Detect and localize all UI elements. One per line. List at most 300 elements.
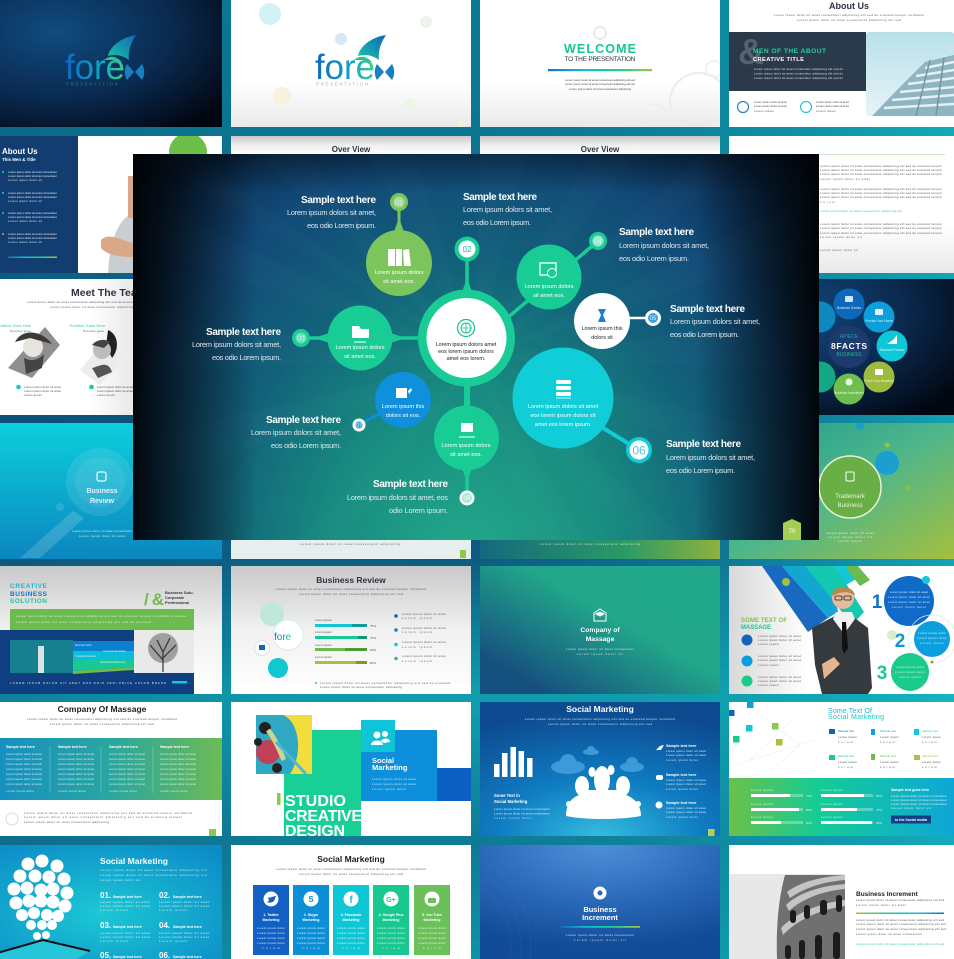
- circle 03: teal folder: sit amet eos.: [344, 354, 376, 360]
- cards intro text: Lorem ipsum dolor sit amet consectetur adipiscing elit sed do eiusmod tempor incididunt: [276, 867, 426, 871]
- text block 06: [666, 439, 755, 475]
- increment intro text: Lorem ipsum dolor sit amet: [856, 903, 906, 907]
- heading: some text of social marketing: Some Text Of: [828, 708, 872, 715]
- gradient band with four columns: Lorem ipsum dolor sit amet: [160, 752, 196, 756]
- gradient band with four columns: Lorem ipsum dolor sit amet: [58, 762, 94, 766]
- numbered items: 01.: [100, 891, 111, 900]
- gradient band with four columns: Lorem ipsum dolor sit amet: [160, 777, 196, 781]
- slide: apiece 8 facts business: [819, 279, 954, 415]
- logo: forex on white: PRESENTATION: [316, 82, 368, 86]
- bullet list: Lorem ipsum dolor sit amet: [402, 612, 446, 616]
- gradient band with four columns: Lorem ipsum dolor sit amet: [6, 752, 42, 756]
- text block 08: Sample text here: [373, 479, 448, 490]
- circle 04: teal browser: sit amet eos.: [533, 293, 565, 299]
- icon list: Lorem ipsum dolor sit amet: [758, 679, 801, 683]
- article text: Lorem ipsum dolor sit amet consectetur adipiscing elit sed do eiusmod tempor: [820, 191, 942, 195]
- balloon intro text: [100, 868, 207, 882]
- slide strip below main slide, left: [231, 540, 471, 559]
- circle 03: teal folder: Lorem ipsum dolors: [335, 345, 385, 351]
- navy panel with pictures: Creative Business: [75, 654, 97, 658]
- magnifier graphic: [20, 448, 134, 558]
- gradient band with four columns: Lorem ipsum dolor: [6, 789, 34, 793]
- icon grid: Lorem: [922, 740, 938, 744]
- numbered circles: 1: [872, 592, 883, 613]
- icon circles with text: Lorem ipsum dolor sit amet: [754, 100, 787, 104]
- bullet list: [394, 612, 446, 663]
- text block 04: [619, 227, 709, 263]
- article text: Lorem ipsum dolor sit: [820, 248, 858, 252]
- slide: social marketing people: [480, 702, 720, 836]
- card: you tube: [414, 885, 450, 955]
- card: facebook: Lorem: [342, 946, 360, 950]
- dotted wave pattern: [482, 860, 531, 959]
- numbered items: Sample text here: [113, 925, 142, 929]
- trademark subtext: Lorem ipsum dolor sit amet: [826, 531, 874, 535]
- card: facebook: Lorem ipsum dolor: [337, 931, 365, 935]
- increment body text: Lorem ipsum dolor sit amet consectetur: [856, 932, 922, 936]
- main slide: six step circle diagram: [133, 154, 819, 540]
- text block 06: Lorem ipsum dolors sit amet,: [666, 453, 755, 462]
- slide: trademark business: [729, 423, 954, 559]
- slide: text article: [729, 136, 954, 273]
- trademark circle: Business: [837, 502, 863, 509]
- green block: [284, 730, 361, 836]
- node 02: [454, 236, 480, 262]
- node 05: 05: [650, 316, 657, 322]
- navy sidebar: About Us: [2, 147, 38, 156]
- social text: Lorem ipsum dolor: [372, 787, 406, 791]
- gradient band with four columns: Lorem ipsum dolor sit amet: [109, 772, 145, 776]
- team intro text: [27, 300, 147, 309]
- numbered items: Lorem ipsum dolor sit amet: [159, 935, 209, 939]
- card: google plus: Lorem ipsum dolor: [377, 936, 405, 940]
- article text: Lorem ipsum dolor sit amet consectetur adipiscing elit sed do eiusmod tempor: [820, 222, 942, 226]
- dark title panel: Lorem ipsum dolor sit amet consectetur adipiscing elit sed do: [754, 76, 843, 80]
- heading: social marketing: Social Marketing: [100, 856, 168, 866]
- node 05: [645, 310, 661, 326]
- progress bars: Lorem ipsum: [315, 655, 332, 659]
- icon list: Lorem ipsum dolor sit amet: [758, 634, 801, 638]
- slide: welcome: [480, 0, 720, 127]
- portrait of man: [101, 133, 207, 273]
- navy sidebar: Lorem ipsum dolor sit amet consectetur: [8, 215, 57, 219]
- gradient band with four columns: Lorem ipsum dolor sit amet: [58, 757, 94, 761]
- article text: Lorem ipsum dolor sit amet consectetur adipiscing elit sed do eiusmod tempor: [820, 172, 942, 176]
- text block 03: [192, 327, 281, 362]
- icon grid: Sample text: [880, 729, 896, 733]
- circle 01: green books: [366, 230, 432, 296]
- bullet list: Lorem ipsum dolor sit amet: [402, 626, 446, 630]
- increment body text: Lorem ipsum dolor sit amet consectetur adipiscing elit sed: [856, 918, 944, 922]
- green text band: Lorem ipsum dolor sit amet consectetur adipiscing elit sed do eiusmod tempor incididunt ut labore: [16, 614, 186, 618]
- team member two: Position goes: [83, 329, 104, 333]
- icon list: [742, 634, 801, 687]
- feature list: Lorem ipsum dolor sit amet: [666, 749, 706, 753]
- welcome text block: Lorem ipsum dolor sit amet consectetur adipiscing elit sed: [565, 78, 635, 82]
- text block 08: Lorem ipsum dolors sit amet, eos: [347, 493, 448, 502]
- numbered items: Lorem ipsum dolor sit amet: [100, 904, 150, 908]
- card: skype: [293, 885, 329, 955]
- people illustration: [566, 765, 641, 819]
- cover subtext: [566, 647, 634, 656]
- card: google plus: 4. Google Plus: [379, 913, 403, 917]
- circle 08: teal monitor: sit amet eos.: [450, 452, 482, 458]
- navy sidebar: Lorem ipsum dolor sit: [8, 178, 42, 182]
- facts wheel: Provide Your Home: [865, 319, 893, 323]
- slide: over view right: Over View: [581, 145, 620, 154]
- navy panel with pictures: Corporate Business: [103, 649, 126, 653]
- icon list: Lorem ipsum: [758, 642, 780, 646]
- card: skype: Lorem ipsum dolor: [297, 936, 325, 940]
- side text with button: Sample text goes here: [891, 788, 929, 792]
- heading: studio creative design: CREATIVE: [285, 808, 362, 825]
- card: skype: 2. Skype: [304, 913, 318, 917]
- numbered items: Lorem ipsum: [100, 939, 128, 943]
- slide: over view left: [231, 136, 471, 154]
- heading: business increment: Business Increment: [856, 891, 919, 898]
- numbered items: Lorem ipsum: [100, 908, 128, 912]
- cards intro text: Lorem ipsum dolor sit amet consectetur adipiscing elit sed: [299, 872, 403, 876]
- slide: about us with portrait: [0, 136, 222, 273]
- text block 04: eos odio Lorem ipsum.: [619, 254, 689, 263]
- gradient band with progress bars: 75%: [806, 794, 812, 798]
- text block 02: Sample text here: [463, 192, 537, 203]
- page marker: [209, 829, 216, 836]
- bullet list: Lorem ipsum: [402, 630, 432, 634]
- gradient band with four columns: Lorem ipsum dolor: [58, 789, 86, 793]
- page number tag: [783, 519, 801, 540]
- gradient band with four columns: Lorem ipsum dolor sit amet: [160, 772, 196, 776]
- numbered circles: [872, 576, 954, 691]
- icon: recycle circle: [594, 886, 606, 900]
- gradient band with four columns: Lorem ipsum dolor sit amet: [109, 777, 145, 781]
- feature list: [656, 744, 706, 819]
- article text: Lorem ipsum dolor sit amet consectetur adipiscing elit sed do eiusmod tempor: [820, 164, 942, 168]
- numbered circles: Lorem ipsum dolor: [892, 605, 926, 609]
- navy sidebar: [0, 136, 78, 273]
- text block 05: [670, 304, 760, 339]
- footnote: [315, 681, 450, 689]
- icon grid: Sample text: [880, 754, 896, 758]
- card: you tube: Marketing: [424, 918, 440, 922]
- card: you tube: Lorem ipsum dolor: [418, 936, 446, 940]
- text block 07: [251, 415, 341, 450]
- balloon intro text: Lorem ipsum dolor sit amet consectetur adipiscing elit: [100, 873, 207, 877]
- heading: studio creative design: [285, 793, 362, 840]
- circle 06: big cyan server: Lorem ipsum dolors sit amet: [528, 404, 599, 410]
- icon grid: Lorem ipsum: [880, 760, 900, 764]
- green text band: [10, 609, 194, 630]
- social bubbles with logo: [254, 602, 303, 678]
- cards intro text: [276, 867, 426, 876]
- connectors: [301, 202, 653, 498]
- slide: business review bars: [231, 566, 471, 694]
- numbered items: Lorem ipsum dolor sit amet: [159, 900, 209, 904]
- bullet list: Lorem ipsum: [402, 659, 432, 663]
- trademark circle: [819, 456, 881, 518]
- card: skype: S: [308, 895, 314, 904]
- icon grid: Sample text: [922, 729, 938, 733]
- navy panel with pictures: LOREM IPSUM DOLOR SIT AMET EOS ODIO VERI PRICE COLOR BRAND: [10, 681, 167, 685]
- trademark subtext: [826, 531, 874, 543]
- gradient band with four columns: Lorem ipsum dolor sit amet: [160, 782, 196, 786]
- page marker: [708, 829, 714, 836]
- card: google plus: [373, 885, 409, 955]
- bullet list: Lorem ipsum dolor sit amet: [402, 654, 446, 658]
- article text: Lorem ipsum dolor sit amet consectetur adipiscing elit: [820, 209, 902, 213]
- text block 03: Sample text here: [206, 327, 281, 338]
- heading: some text of massage: [741, 618, 787, 631]
- slide: some text of massage with man: [729, 566, 954, 694]
- circle 05: white hourglass: dolors sit: [591, 335, 613, 341]
- columns intro text: [27, 717, 177, 726]
- chart caption: Lorem ipsum dolor: [494, 816, 532, 820]
- progress bars: Lorem ipsum: [315, 630, 332, 634]
- accent bar: [277, 793, 280, 805]
- text block 05: Lorem ipsum dolors sit amet,: [670, 317, 760, 326]
- slide strip below main slide, left: Lorem ipsum dolor sit amet consectetur adipiscing: [300, 542, 400, 546]
- blue blocks: [361, 720, 471, 801]
- numbered items: Sample text here: [173, 955, 202, 959]
- heading: meet the team: Meet The Team: [71, 287, 146, 299]
- card: google plus: Marketing: [383, 918, 399, 922]
- heading: some text of massage: SOME TEXT OF: [741, 618, 787, 624]
- card: twitter: Lorem ipsum dolor: [257, 926, 285, 930]
- card: you tube: 5. You Tube: [422, 913, 442, 917]
- text block 04: Sample text here: [619, 227, 694, 238]
- cover subtext: [566, 933, 634, 942]
- icon list: Lorem ipsum dolor sit amet: [758, 654, 801, 658]
- cover subtext: Lorem ipsum dolor sit amet consectetur: [566, 933, 634, 937]
- welcome text block: Lorem ipsum dolor sit amet consectetur adipiscing elit sed: [565, 82, 635, 86]
- dark title panel: MEN OF THE ABOUT: [753, 48, 826, 55]
- gradient band with progress bars: Lorem ipsum: [821, 815, 844, 819]
- gradient band with progress bars: Lorem ipsum: [751, 788, 774, 792]
- gradient band with four columns: Sample text here: [109, 745, 138, 749]
- increment body text: Lorem ipsum dolor sit amet consectetur adipiscing elit sed: [856, 942, 944, 946]
- feature list: Lorem ipsum dolor: [666, 758, 698, 762]
- node 06: [626, 437, 652, 463]
- gradient band with four columns: Sample text here: [6, 745, 35, 749]
- icon grid: Lorem ipsum: [922, 735, 942, 739]
- subheading: TO THE PRESENTATION: [564, 56, 636, 63]
- node 08: 08: [464, 496, 471, 502]
- icon circles with text: Lorem ipsum: [754, 109, 774, 113]
- slide: studio creative design: [231, 702, 471, 840]
- numbered items: Sample text here: [173, 895, 202, 899]
- text block 07: Lorem ipsum dolors sit amet,: [251, 428, 341, 437]
- network squares: [729, 702, 815, 772]
- diagonal colour stripes: [762, 566, 870, 632]
- balloon intro text: Lorem ipsum dolor sit: [100, 878, 140, 882]
- card: skype: Lorem ipsum dolor: [297, 941, 325, 945]
- text block 03: Lorem ipsum dolors sit amet,: [192, 340, 281, 349]
- text block 01: Sample text here: [301, 195, 376, 206]
- card: skype: Lorem: [302, 946, 320, 950]
- heading: company of massage: Company Of Massage: [58, 704, 147, 714]
- gradient band with four columns: Lorem ipsum dolor sit amet: [109, 782, 145, 786]
- gradient band with four columns: Lorem ipsum dolor sit amet: [58, 772, 94, 776]
- feature list: Lorem ipsum dolor sit amet: [666, 782, 706, 786]
- team member two: [70, 324, 133, 397]
- ampersand tagline: Professional: [165, 600, 189, 605]
- increment body text: [856, 918, 946, 946]
- card: skype: Lorem ipsum dolor: [297, 931, 325, 935]
- icon grid: Lorem: [922, 765, 938, 769]
- ampersand tagline: /&: [144, 590, 164, 609]
- feature list: Lorem ipsum dolor sit amet: [666, 810, 706, 814]
- gradient band with four columns: Lorem ipsum dolor: [160, 789, 188, 793]
- icon grid: Sample text: [838, 729, 854, 733]
- bottom note with icon: [6, 811, 192, 825]
- bottom note with icon: Lorem ipsum dolor sit amet consectetur adipiscing: [24, 820, 109, 824]
- icon circles with text: Lorem ipsum dolor sit amet: [816, 100, 849, 104]
- numbered circles: 2: [895, 631, 905, 652]
- gradient band with four columns: Lorem ipsum dolor sit amet: [58, 777, 94, 781]
- card: facebook: [333, 885, 369, 955]
- feature list: Sample text here: [666, 773, 696, 777]
- heading: welcome: WELCOME: [564, 42, 636, 56]
- numbered items: Lorem ipsum dolor sit amet: [100, 900, 150, 904]
- card: you tube: Lorem ipsum dolor: [418, 941, 446, 945]
- bottom note with icon: Lorem ipsum dolor sit amet consectetur adipiscing elit sed do eiusmod tempor incididunt: [24, 811, 192, 815]
- navy sidebar: Lorem ipsum dolor sit amet consectetur: [8, 170, 57, 174]
- gradient divider bar: [561, 926, 640, 928]
- trademark circle: Trademark: [835, 493, 866, 500]
- navy panel with pictures: Professional Business: [100, 660, 126, 664]
- node 01: 01: [395, 200, 403, 206]
- node 03: 03: [297, 336, 305, 342]
- green text band: Lorem ipsum dolor sit amet consectetur adipiscing elit sed do eiusmod: [16, 620, 151, 624]
- faint smileys: [594, 27, 728, 131]
- ampersand tagline: Business Solu.: [165, 590, 194, 595]
- numbered circles: Lorem ipsum dolor: [896, 665, 924, 669]
- node 01: [390, 193, 408, 211]
- numbered items: Sample text here: [113, 895, 142, 899]
- card: facebook: Lorem ipsum dolor: [337, 941, 365, 945]
- numbered items: Lorem ipsum: [159, 939, 188, 943]
- text block 06: eos odio Lorem ipsum.: [666, 466, 735, 475]
- team intro text: Lorem ipsum dolor sit amet consectetur adipiscing elit sed do eiusmod tempor: [27, 300, 147, 304]
- circle 07: blue note: dolors sit eos.: [386, 413, 421, 419]
- numbered items: Sample text here: [173, 925, 202, 929]
- icon grid: Lorem ipsum: [838, 760, 858, 764]
- circle 04: teal browser: [516, 244, 582, 310]
- numbered items: Sample text here: [113, 955, 142, 959]
- gradient band with four columns: Lorem ipsum dolor sit amet: [58, 752, 94, 756]
- about intro text: Lorem ipsum dolor sit amet consectetur adipiscing elit sed do eiusmod tempor incididunt: [774, 13, 924, 17]
- footnote: Lorem ipsum dolor sit amet consectetur adipiscing elit sed do eiusmod: [320, 681, 450, 685]
- dark title panel: CREATIVE TITLE: [753, 57, 804, 63]
- icon grid: Lorem: [838, 765, 854, 769]
- review intro text: Lorem ipsum dolor sit amet consectetur adipiscing elit sed do eiusmod tempor incididunt: [276, 587, 426, 591]
- navy sidebar: Lorem ipsum dolor sit amet consectetur: [8, 191, 57, 195]
- logo: forex on dark: PRESENTATION: [66, 82, 118, 86]
- review intro text: [276, 587, 426, 596]
- logo: forex on dark: fore: [65, 48, 125, 87]
- circle 07: blue note: [375, 372, 431, 428]
- subtext: Lorem ipsum dolor sit amet: [79, 534, 125, 538]
- numbered items: 02.: [159, 891, 170, 900]
- numbered items: Lorem ipsum dolor sit amet: [100, 931, 150, 935]
- slide: business increment colosseum: [729, 845, 954, 959]
- gradient band with four columns: Lorem ipsum dolor sit amet: [58, 767, 94, 771]
- gradient band with four columns: Lorem ipsum dolor sit amet: [6, 757, 42, 761]
- circle 06: big cyan server: eos lorem ipsum dolors sit: [531, 413, 596, 419]
- icon grid: Lorem: [880, 765, 896, 769]
- gradient band with four columns: Lorem ipsum dolor sit amet: [160, 757, 196, 761]
- numbered circles: Lorem ipsum dolor: [917, 636, 947, 640]
- chart caption: [494, 793, 550, 820]
- team member two: Lorem ipsum dolor sit amet: [97, 385, 133, 389]
- progress bars: Lorem ipsum: [315, 643, 332, 647]
- article text: Lorem ipsum dolor sit amet consectetur adipiscing elit sed do eiusmod tempor: [820, 231, 942, 235]
- team member two: Position Goes Here: [70, 324, 105, 328]
- slide: over view left: Over View: [332, 145, 371, 154]
- navy sidebar: Lorem ipsum dolor sit amet consectetur: [8, 195, 57, 199]
- slide: meet the team: [0, 279, 147, 415]
- slide: about us men of the about: [729, 0, 954, 127]
- circle 05: white hourglass: Lorem ipsum this: [581, 326, 623, 332]
- numbered circles: Lorem ipsum: [920, 641, 944, 645]
- bullet list: Lorem ipsum dolor sit amet: [402, 640, 446, 644]
- numbered circles: 3: [877, 663, 887, 684]
- facts wheel: BUSINESS: [836, 352, 862, 358]
- chart caption: Lorem ipsum dolor sit amet consectetur: [494, 807, 550, 811]
- slide: social marketing balloon: [0, 845, 222, 959]
- team member one: Lorem ipsum: [24, 393, 42, 397]
- icon grid: Lorem ipsum: [880, 735, 900, 739]
- navy sidebar: Lorem ipsum dolor sit amet consectetur: [8, 211, 57, 215]
- numbered circles: Lorem ipsum dolor: [918, 631, 946, 635]
- card: google plus: G+: [386, 897, 396, 904]
- node 07: [352, 418, 366, 432]
- faint emoji bubbles: [259, 3, 466, 127]
- circle 07: blue note: Lorem ipsum this: [382, 404, 424, 410]
- heading: business review: [86, 488, 118, 505]
- circle 06: big cyan server: [512, 348, 614, 448]
- gradient divider bar: [856, 912, 944, 914]
- navy panel with pictures: [0, 630, 194, 694]
- gradient band with four columns: Lorem ipsum dolor sit amet: [109, 767, 145, 771]
- side text with button: Lorem ipsum dolor sit: [891, 806, 931, 810]
- ampersand tagline: Corporate: [165, 595, 185, 600]
- gradient band with four columns: Lorem ipsum dolor sit amet: [109, 762, 145, 766]
- bar chart: [494, 747, 532, 777]
- feature list: Lorem ipsum dolor sit amet: [666, 753, 706, 757]
- gradient band with four columns: Lorem ipsum dolor sit amet: [109, 752, 145, 756]
- icon circles with text: [738, 100, 849, 113]
- heading: studio creative design: DESIGN: [285, 823, 345, 840]
- gradient band with four columns: Lorem ipsum dolor sit amet: [6, 772, 42, 776]
- gradient band with progress bars: 60%: [806, 821, 812, 825]
- slide: forex logo on navy: [0, 0, 222, 127]
- numbered items: Lorem ipsum dolor sit amet: [159, 931, 209, 935]
- slide: over view right: [480, 136, 720, 154]
- progress bars: 60%: [370, 648, 376, 652]
- numbered items: Lorem ipsum dolor sit amet: [159, 904, 209, 908]
- text block 02: eos odio Lorem ipsum.: [463, 218, 531, 227]
- chart caption: Social Marketing: [494, 799, 528, 804]
- card: twitter: Lorem ipsum dolor: [257, 941, 285, 945]
- icon circles with text: Lorem ipsum dolor sit amet: [816, 104, 849, 108]
- slide strip below main slide, right: [480, 540, 720, 559]
- gradient band with progress bars: 98%: [876, 821, 882, 825]
- heading: some text of social marketing: Social Marketing: [828, 714, 884, 721]
- heading: business review: Business Review: [316, 575, 386, 585]
- feature list: Sample text here: [666, 744, 696, 748]
- welcome text block: Lorem ipsum dolor sit amet consectetur adipiscing: [569, 87, 631, 91]
